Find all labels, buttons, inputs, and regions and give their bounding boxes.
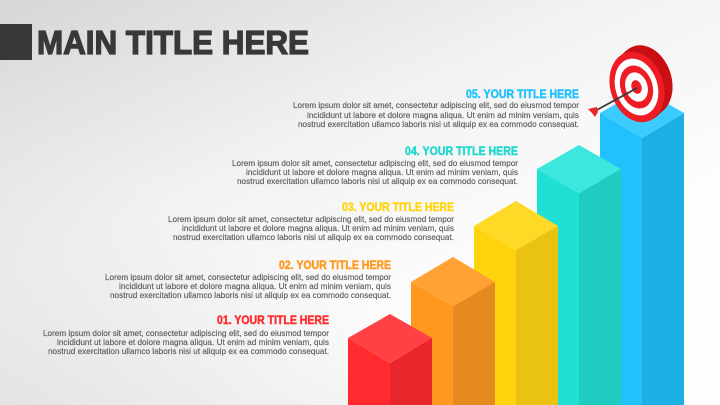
- text block 01: nostrud exercitation ullamco laboris nisi ut aliquip ex ea commodo consequat.: [48, 346, 329, 356]
- text block 03: incididunt ut labore et dolore magna aliqua. Ut enim ad minim veniam, quis: [182, 223, 454, 233]
- text block 05: [293, 87, 579, 129]
- bar 03: yellow: [474, 201, 558, 405]
- text block 04: Lorem ipsum dolor sit amet, consectetur adipiscing elit, sed do eiusmod tempor: [232, 158, 518, 168]
- text block 02: nostrud exercitation ullamco laboris nisi ut aliquip ex ea commodo consequat.: [110, 290, 391, 300]
- bar 02: orange: [411, 257, 495, 405]
- text block 04: nostrud exercitation ullamco laboris nisi ut aliquip ex ea commodo consequat.: [237, 176, 518, 186]
- text block 02: [105, 258, 391, 300]
- text block 01: 01. YOUR TITLE HERE: [217, 313, 329, 327]
- title: MAIN TITLE HERE: [37, 24, 309, 61]
- text block 02: incididunt ut labore et dolore magna aliqua. Ut enim ad minim veniam, quis: [119, 281, 391, 291]
- text block 01: incididunt ut labore et dolore magna aliqua. Ut enim ad minim veniam, quis: [57, 337, 329, 347]
- text block 04: 04. YOUR TITLE HERE: [405, 144, 518, 158]
- text block 03: Lorem ipsum dolor sit amet, consectetur adipiscing elit, sed do eiusmod tempor: [168, 214, 454, 224]
- text block 03: nostrud exercitation ullamco laboris nisi ut aliquip ex ea commodo consequat.: [173, 232, 454, 242]
- text block 04: [232, 144, 518, 186]
- text block 05: Lorem ipsum dolor sit amet, consectetur adipiscing elit, sed do eiusmod tempor: [293, 100, 579, 110]
- text block 03: 03. YOUR TITLE HERE: [342, 200, 454, 214]
- title marker square: [0, 24, 32, 60]
- text block 02: Lorem ipsum dolor sit amet, consectetur adipiscing elit, sed do eiusmod tempor: [105, 272, 391, 282]
- bar 04: teal: [537, 145, 621, 405]
- text block 01: [43, 313, 329, 356]
- bar 05: blue: [600, 89, 684, 405]
- text block 05: nostrud exercitation ullamco laboris nisi ut aliquip ex ea commodo consequat.: [298, 119, 579, 129]
- text block 02: 02. YOUR TITLE HERE: [279, 258, 391, 272]
- text block 04: incididunt ut labore et dolore magna aliqua. Ut enim ad minim veniam, quis: [246, 167, 518, 177]
- text block 03: [168, 200, 454, 242]
- bar 01: red: [348, 314, 432, 405]
- text block 05: 05. YOUR TITLE HERE: [466, 87, 579, 101]
- text block 01: Lorem ipsum dolor sit amet, consectetur adipiscing elit, sed do eiusmod tempor: [43, 328, 329, 338]
- text block 05: incididunt ut labore et dolore magna aliqua. Ut enim ad minim veniam, quis: [307, 110, 579, 120]
- icon: target with arrow: [588, 38, 681, 129]
